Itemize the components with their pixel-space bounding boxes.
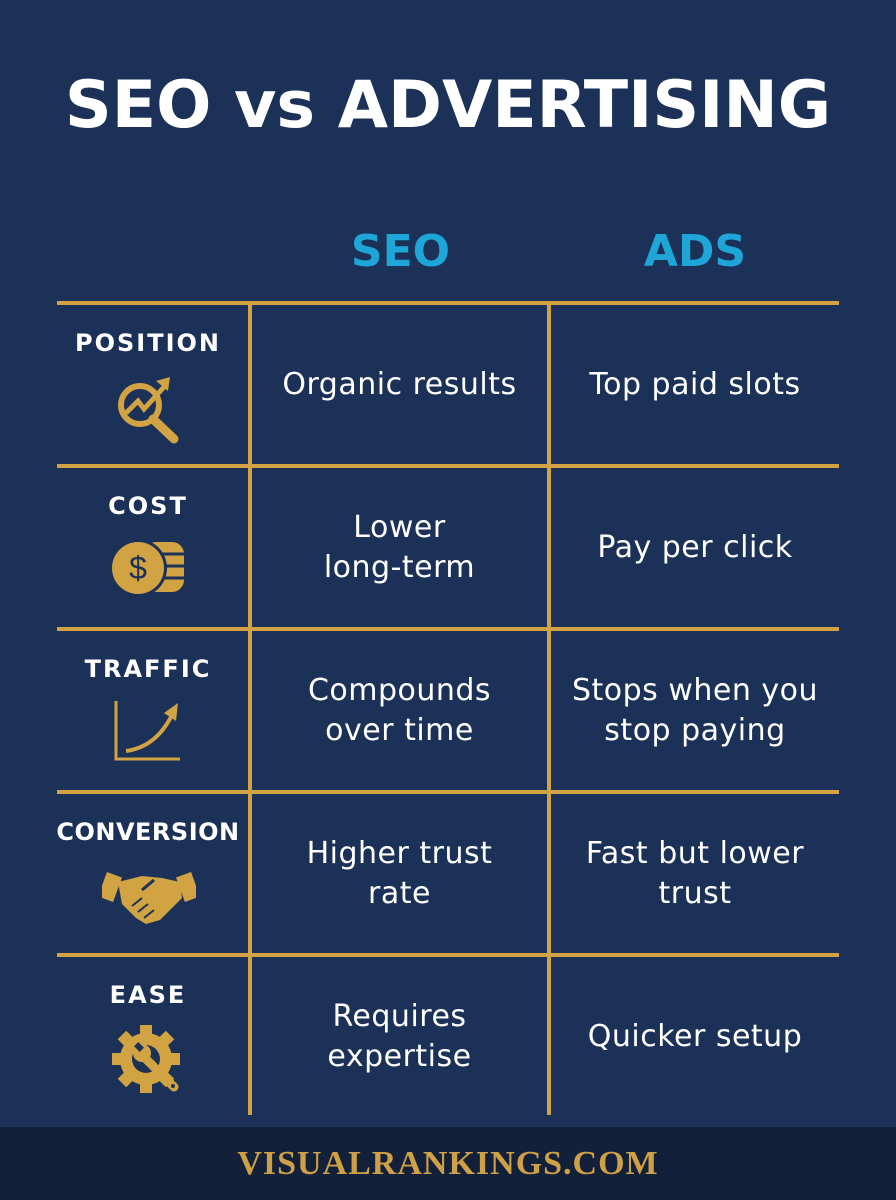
ADS text: trust: [658, 876, 732, 911]
SEO text: rate: [368, 876, 431, 911]
icon: coins: [112, 542, 184, 594]
ADS text: [572, 673, 818, 748]
SEO text: expertise: [327, 1039, 472, 1074]
SEO text: [308, 673, 491, 748]
ADS text: Quicker setup: [588, 1019, 802, 1054]
icon: gear wrench: [112, 1025, 180, 1093]
footer band: [0, 1127, 896, 1200]
icon: magnifier chart: [118, 377, 178, 444]
label: TRAFFIC: TRAFFIC: [85, 655, 211, 683]
ADS text: Top paid slots: [589, 367, 801, 402]
label: EASE: EASE: [110, 981, 186, 1009]
column header: SEO: SEO: [351, 226, 450, 277]
icon: growth curve: [114, 701, 180, 760]
SEO text: Requires: [332, 999, 467, 1034]
title: SEO vs ADVERTISING: [65, 68, 831, 143]
icon: handshake: [102, 872, 196, 924]
ADS text: Stops when you: [572, 673, 818, 708]
SEO text: [307, 836, 492, 911]
label: COST: COST: [108, 492, 188, 520]
row: ease: [110, 981, 802, 1093]
row: traffic: [84, 655, 818, 760]
label: CONVERSION: CONVERSION: [56, 818, 240, 846]
column header: ADS: ADS: [644, 226, 746, 277]
SEO text: long-term: [324, 550, 475, 585]
SEO text: over time: [325, 713, 474, 748]
ADS text: Fast but lower: [586, 836, 804, 871]
ADS text: [586, 836, 804, 911]
SEO text: Higher trust: [307, 836, 492, 871]
row: position: [75, 329, 801, 444]
SEO text: [324, 510, 475, 585]
ADS text: Pay per click: [597, 530, 793, 565]
label: POSITION: POSITION: [75, 329, 221, 357]
SEO text: [327, 999, 472, 1074]
SEO text: Organic results: [282, 367, 517, 402]
icon: coins: $: [129, 550, 147, 586]
SEO text: Lower: [353, 510, 446, 545]
row: cost: [108, 492, 793, 594]
footer text: VISUALRANKINGS.COM: [237, 1145, 659, 1182]
SEO text: Compounds: [308, 673, 491, 708]
ADS text: stop paying: [604, 713, 786, 748]
row: conversion: [56, 818, 804, 924]
